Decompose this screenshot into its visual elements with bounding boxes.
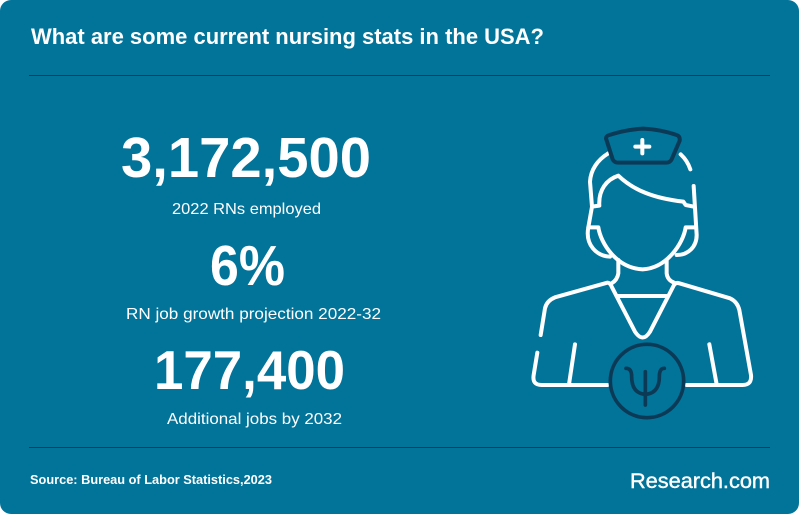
stat: job growth: 6%	[210, 234, 285, 298]
logo: Research.com: Research.com	[630, 470, 770, 493]
cap cross	[635, 140, 649, 153]
stat: additional jobs: Additional jobs by 2032	[167, 411, 342, 428]
nurse cap	[606, 129, 680, 163]
stat: RNs employed: 2022 RNs employed	[172, 201, 321, 218]
icon: nurse	[533, 129, 751, 418]
stat: additional jobs: 177,400	[154, 339, 345, 401]
stat: additional jobs	[154, 339, 345, 428]
nurse head and body outline	[533, 153, 751, 385]
source note: Source: Bureau of Labor Statistics,2023	[30, 472, 272, 487]
stat: RNs employed: 3,172,500	[121, 126, 371, 190]
stat: job growth: RN job growth projection 2022-32	[126, 306, 381, 323]
psi badge	[610, 344, 684, 418]
title: What are some current nursing stats in the USA?	[31, 24, 544, 49]
stat: RNs employed	[121, 126, 371, 218]
stat: job growth	[126, 234, 381, 323]
